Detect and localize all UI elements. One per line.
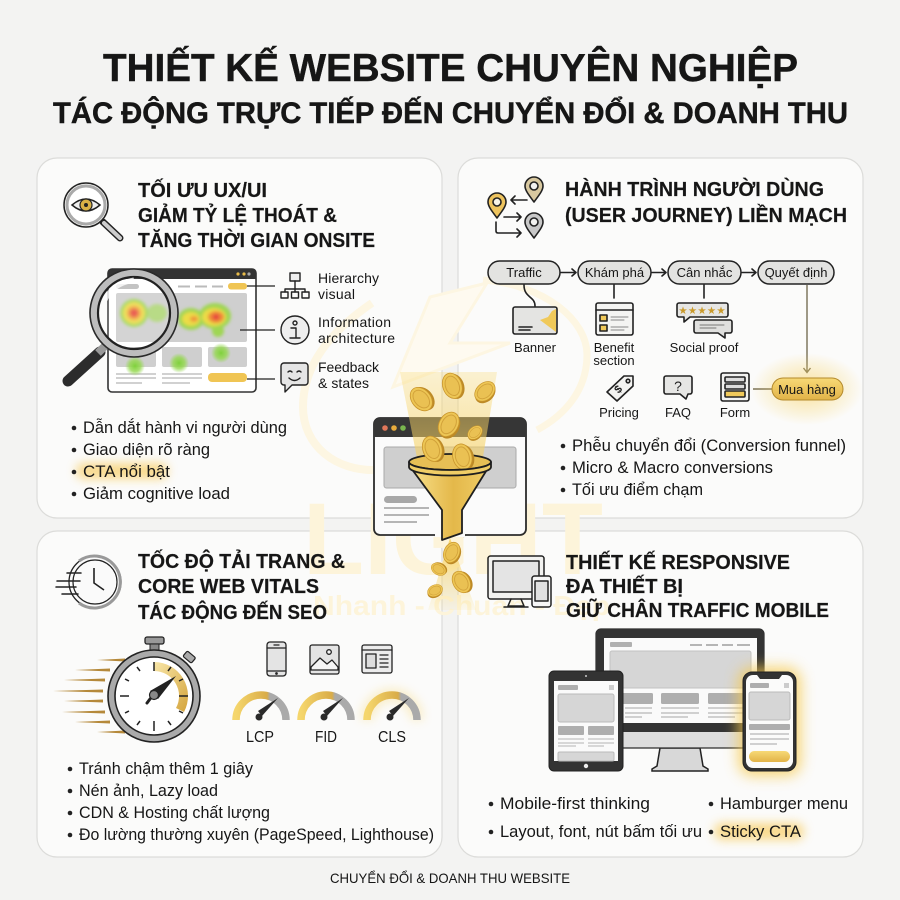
heatmap browser [108, 269, 256, 392]
speed lines [53, 658, 125, 734]
step: Traffic: Traffic [506, 265, 542, 280]
bullet list: Nén ảnh, Lazy load [79, 781, 218, 800]
label: information architecture: architecture [318, 330, 395, 346]
step: Cân nhắc [668, 261, 741, 284]
bullet list: Mobile-first thinking [500, 794, 650, 813]
heading: ĐA THIẾT BỊ [566, 575, 683, 598]
title line 2: TÁC ĐỘNG TRỰC TIẾP ĐẾN CHUYỂN ĐỔI & DOANH THU [53, 96, 848, 130]
heading: HÀNH TRÌNH NGƯỜI DÙNG [565, 177, 824, 201]
connector lines [240, 286, 275, 379]
gauge: FID: FID [315, 729, 337, 746]
heading: GIỮ CHÂN TRAFFIC MOBILE [566, 598, 829, 622]
highlight glow [76, 463, 168, 479]
connectors to touchpoints [524, 285, 704, 306]
label: information architecture: Information [318, 314, 391, 330]
journey flow [488, 261, 863, 425]
panel: user journey content [488, 177, 863, 499]
icon: monitor and phone [488, 556, 551, 607]
panel: UX/UI content [64, 178, 395, 503]
bullet list: Giao diện rõ ràng [83, 440, 210, 459]
icon: banner [513, 307, 557, 334]
bullet list: Đo lường thường xuyên (PageSpeed, Lighthouse) [79, 825, 434, 844]
bullet list: Hamburger menu [720, 794, 848, 813]
arrows between steps [561, 269, 756, 276]
panel: page speed card background [37, 531, 442, 857]
icon: social proof: ★★★★★ [679, 306, 726, 316]
icon: form [721, 373, 749, 401]
heading: THIẾT KẾ RESPONSIVE [566, 551, 790, 574]
bullet list: CDN & Hosting chất lượng [79, 803, 270, 822]
Mua hàng glow [751, 353, 863, 425]
panel: UX/UI card background [37, 158, 442, 518]
step: Quyết định: Quyết định [765, 265, 827, 280]
bullet list [72, 418, 287, 503]
heading: TỐI ƯU UX/UI [138, 178, 267, 202]
heading [138, 178, 375, 252]
step: Khám phá [578, 261, 651, 284]
watermark tagline: Nhanh - Chuẩn - Đẹp [313, 590, 610, 621]
label: banner: Banner [514, 340, 557, 355]
gauge: LCP: LCP [246, 729, 274, 746]
label: information architecture [318, 314, 395, 346]
purchase button: Mua hàng [778, 382, 836, 397]
heading [566, 551, 829, 622]
bullet list: Phễu chuyển đổi (Conversion funnel) [572, 436, 846, 455]
icon: FAQ bubble: ? [674, 378, 682, 394]
heading [565, 177, 847, 227]
panel: responsive card background [458, 531, 863, 857]
icon: feedback bubble [281, 363, 308, 392]
coins falling [406, 370, 500, 473]
label: hierarchy visual: Hierarchy [318, 270, 379, 286]
icon: social proof [677, 303, 732, 338]
icon: fast clock [56, 556, 121, 608]
form connector [753, 388, 772, 390]
coins below funnel [425, 540, 476, 600]
bullet list: Dẫn dắt hành vi người dùng [83, 418, 287, 437]
label: FAQ: FAQ [665, 405, 691, 420]
label: feedback states: Feedback [318, 359, 380, 375]
gauge: FID [301, 695, 351, 746]
icon: hierarchy [281, 273, 309, 298]
bullet list [561, 436, 846, 499]
highlight glow [714, 823, 804, 840]
watermark text LIGHT: LIGHT [303, 482, 603, 596]
bullet list: Sticky CTA [720, 822, 802, 841]
funnel [409, 462, 491, 540]
heading: TÁC ĐỘNG ĐẾN SEO [138, 600, 327, 624]
icon: information [281, 316, 309, 344]
icon: phone [267, 642, 286, 676]
label: benefit section [593, 340, 635, 368]
light beam below funnel [428, 538, 476, 610]
bullet list [68, 759, 434, 844]
heading: CORE WEB VITALS [138, 575, 319, 598]
funnel back rim [409, 454, 491, 470]
label: hierarchy visual: visual [318, 286, 355, 302]
icon: pricing tag [607, 376, 633, 401]
label: pricing: Pricing [599, 405, 639, 420]
label: social proof: Social proof [670, 340, 739, 355]
icon: benefit section [596, 303, 633, 335]
bullet list: CTA nổi bật [83, 462, 170, 481]
label: form: Form [720, 405, 750, 420]
step: Traffic [488, 261, 560, 284]
heading: GIẢM TỶ LỆ THOÁT & [138, 203, 337, 227]
gauge: CLS: CLS [378, 729, 406, 746]
gauge: LCP [236, 695, 286, 746]
icon: FAQ bubble [664, 376, 692, 399]
panel: responsive content [488, 551, 848, 841]
gauge: CLS [367, 695, 417, 746]
heading: (USER JOURNEY) LIỀN MẠCH [565, 204, 847, 227]
device: phone with glow [738, 667, 801, 776]
icon: image [310, 645, 339, 674]
bullet list [489, 794, 848, 841]
bullet list: Giảm cognitive load [83, 484, 230, 503]
step: Quyết định [758, 261, 834, 284]
center funnel illustration [374, 370, 526, 610]
device: desktop monitor [596, 629, 764, 771]
decision arrow [804, 285, 810, 372]
panel: user journey card background [458, 158, 863, 518]
footer: CHUYỂN ĐỔI & DOANH THU WEBSITE [330, 869, 570, 886]
step: Khám phá: Khám phá [585, 265, 645, 280]
bullet list: Tối ưu điểm chạm [572, 480, 703, 499]
icon: browser [362, 645, 392, 673]
heading: TĂNG THỜI GIAN ONSITE [138, 228, 375, 252]
stopwatch [108, 637, 200, 742]
label: feedback states [318, 359, 380, 391]
title [53, 46, 848, 130]
heading [138, 549, 345, 624]
icon: large magnifier [68, 269, 178, 381]
icon: magnifier with eye [64, 183, 120, 238]
browser window [374, 418, 526, 537]
purchase button [772, 378, 843, 400]
watermark logo [303, 280, 610, 621]
bullet list: Tránh chậm thêm 1 giây [79, 759, 253, 778]
label: benefit section: Benefit [594, 340, 635, 355]
label: benefit section: section [593, 353, 635, 368]
label: feedback states: & states [318, 375, 369, 391]
label: hierarchy visual [318, 270, 379, 302]
step: Cân nhắc: Cân nhắc [677, 265, 733, 280]
heading: TỐC ĐỘ TẢI TRANG & [138, 549, 345, 573]
icon: pricing tag: $ [612, 383, 625, 396]
bullet list: Layout, font, nút bấm tối ưu [500, 822, 702, 841]
panel: page speed content [53, 549, 434, 844]
light beam above funnel [400, 372, 497, 463]
title line 1: THIẾT KẾ WEBSITE CHUYÊN NGHIỆP [103, 46, 798, 90]
icon: journey pins [488, 177, 543, 238]
device: tablet [549, 671, 623, 771]
bullet list: Micro & Macro conversions [572, 458, 773, 477]
